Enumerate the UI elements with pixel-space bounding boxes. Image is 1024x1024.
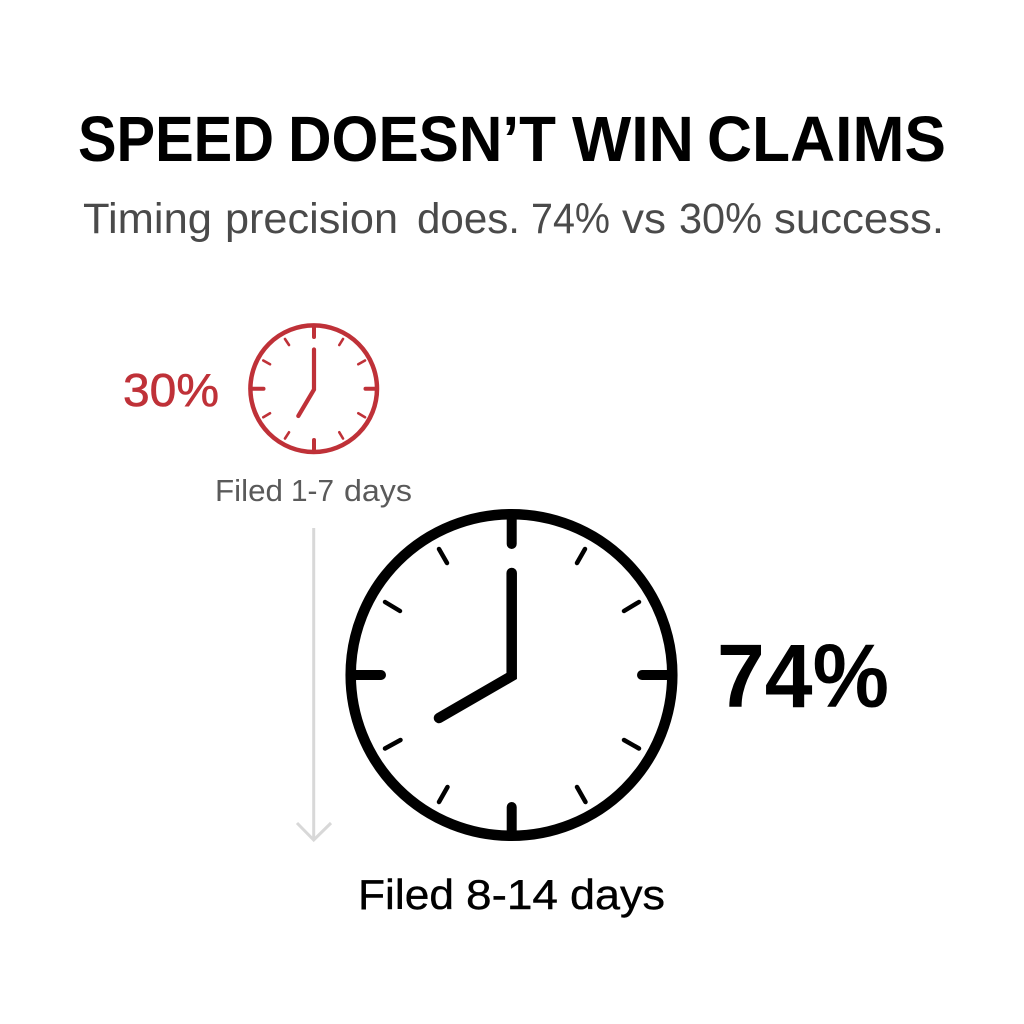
title: SPEED [78, 103, 274, 175]
title: WIN [572, 103, 694, 175]
subtitle: 30% [679, 195, 762, 243]
subtitle: does. [417, 195, 520, 243]
title [78, 103, 946, 175]
subtitle: 74% [531, 195, 610, 243]
subtitle: success. [774, 195, 944, 243]
label: filed 1-7 days: Filed [215, 473, 283, 508]
subtitle [83, 195, 944, 243]
subtitle: vs [622, 195, 666, 243]
icon: small red clock [250, 325, 377, 452]
label: filed 1-7 days [215, 473, 412, 508]
label: filed 8-14 days: 8-14 [466, 871, 558, 918]
icon: large black clock [351, 514, 672, 836]
title: CLAIMS [707, 103, 946, 175]
subtitle: precision [225, 195, 398, 243]
label: filed 8-14 days: days [570, 871, 665, 918]
label: 30%: 30% [123, 364, 219, 416]
label: filed 8-14 days: Filed [358, 871, 454, 918]
subtitle: Timing [83, 195, 212, 243]
label: filed 8-14 days [358, 871, 665, 918]
label: 74%: 74% [717, 627, 889, 727]
label: filed 1-7 days: days [344, 473, 412, 508]
title: DOESN’T [288, 103, 556, 175]
arrow: timeline [297, 528, 331, 840]
label: filed 1-7 days: 1-7 [291, 473, 334, 508]
